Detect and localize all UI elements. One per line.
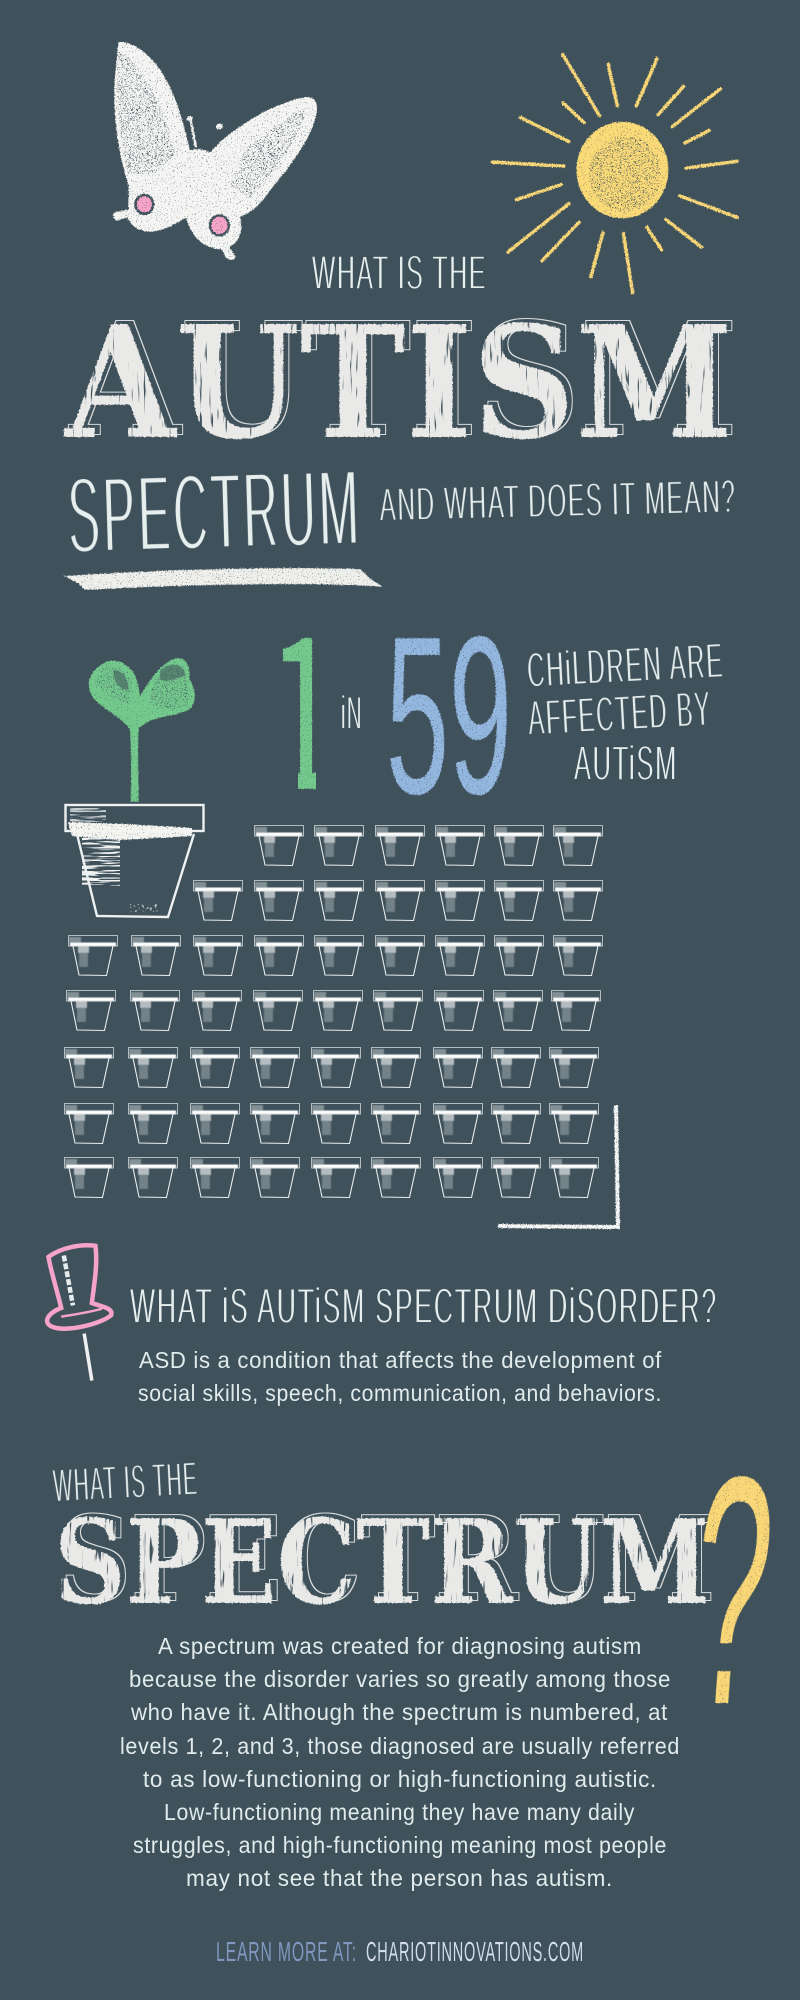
underline stroke	[64, 568, 383, 590]
text block: spectrum explanation	[120, 1633, 680, 1891]
bracket	[498, 1105, 618, 1227]
text block: spectrum explanation: may not see that the person has autism.	[186, 1865, 613, 1891]
heading: what is the: WHAT IS THE	[312, 247, 487, 300]
footer: LEARN MORE AT:	[216, 1936, 357, 1967]
footer	[216, 1936, 584, 1967]
text block: spectrum explanation: to as low-functioning or high-functioning autistic.	[143, 1766, 657, 1792]
text: iN	[341, 686, 363, 739]
chart: pot grid, 58 small pots	[64, 826, 602, 1198]
text: 1: 1	[267, 543, 340, 850]
question mark: ?	[681, 1409, 784, 1772]
text block: asd definition: social skills, speech, communication, and behaviors.	[138, 1380, 662, 1406]
text block: spectrum explanation: who have it. Although the spectrum is numbered, at	[130, 1699, 668, 1725]
text block: asd definition: ASD is a condition that affects the development of	[139, 1347, 662, 1373]
footer: CHARIOTINNOVATIONS.COM	[366, 1936, 584, 1967]
text: children are affected by autism	[526, 634, 725, 791]
text: children are affected by autism: AUTiSM	[574, 737, 678, 791]
text: WHAT IS THE	[52, 1451, 199, 1512]
icon: push pin	[47, 1245, 111, 1381]
heading: spectrum: SPECTRUM	[54, 1495, 710, 1631]
heading: autism: AUTISM	[63, 291, 733, 474]
text block: spectrum explanation: levels 1, 2, and 3, those diagnosed are usually referred	[120, 1733, 680, 1759]
text: SPECTRUM	[66, 446, 364, 576]
icon: sun	[492, 55, 737, 293]
text block: spectrum explanation: struggles, and high-functioning meaning most people	[133, 1832, 667, 1858]
text: 59: 59	[386, 589, 512, 841]
text block: spectrum explanation: A spectrum was created for diagnosing autism	[158, 1633, 642, 1659]
text block: spectrum explanation: Low-functioning meaning they have many daily	[164, 1799, 635, 1825]
text block: spectrum explanation: because the disorder varies so greatly among those	[129, 1666, 671, 1692]
text block: asd definition	[138, 1347, 662, 1406]
icon: butterfly	[113, 42, 317, 260]
icon: seedling	[89, 658, 195, 802]
icon: large flower pot	[66, 805, 204, 917]
